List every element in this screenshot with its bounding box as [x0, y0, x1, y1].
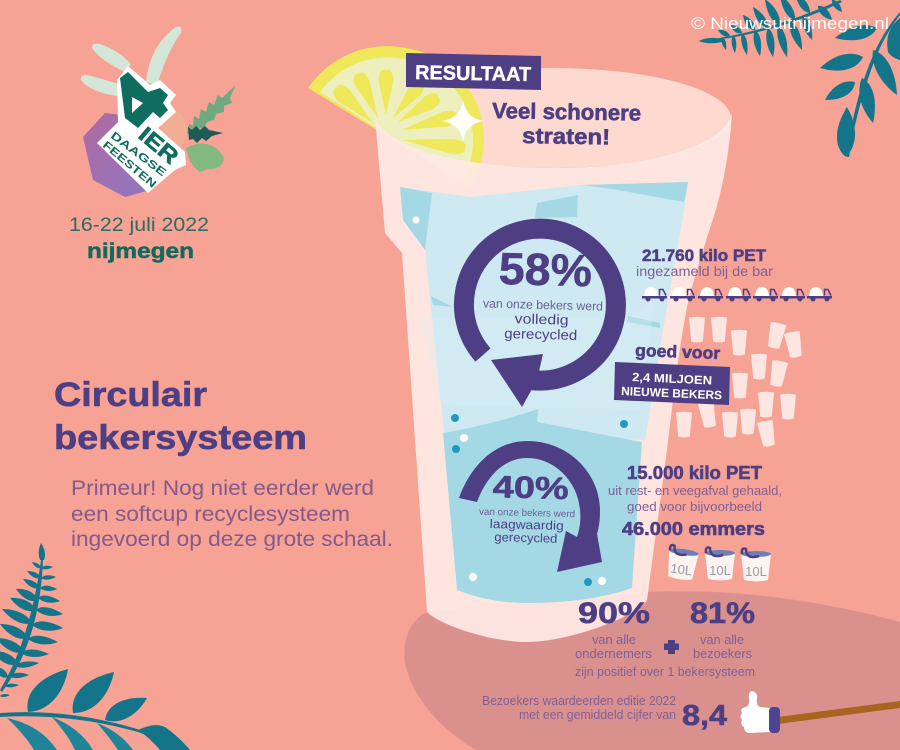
- thumbs up on stick: [740, 691, 900, 733]
- rating score: 8,4: [682, 700, 727, 732]
- stat 90%: van alle: [592, 633, 636, 647]
- thumb hand: [740, 691, 771, 733]
- stat 58%: gerecycled: [504, 325, 577, 343]
- logo peach circle: [139, 106, 187, 154]
- stat 40%: gerecycled: [494, 530, 558, 546]
- stat 21.760 kilo: [636, 246, 774, 279]
- logo purple octagon: [83, 113, 165, 197]
- stat 40%: van onze bekers werd: [479, 507, 575, 520]
- bucket icons: 10L: [670, 561, 693, 578]
- event city: nijmegen: [87, 240, 194, 263]
- cuff: [769, 707, 780, 733]
- good for label: goed voor: [635, 341, 721, 363]
- glass body front: [375, 113, 732, 642]
- table shadow: [404, 591, 900, 750]
- logo badge: [97, 66, 186, 193]
- rating caption: [482, 694, 676, 722]
- intro text: [71, 477, 393, 551]
- logo dark fern: [188, 126, 223, 143]
- stat 81%: van alle: [700, 633, 744, 647]
- bucket icons: [665, 545, 771, 582]
- left column heading: Circulair: [54, 376, 207, 414]
- intro text: Primeur! Nog niet eerder werd: [71, 477, 374, 500]
- glass: [308, 46, 732, 642]
- stat 90%: 90%: [578, 597, 650, 630]
- stat 15.000 kilo: [608, 463, 782, 539]
- lemon slice: [308, 46, 484, 187]
- stat 58%: van onze bekers werd: [483, 296, 603, 314]
- logo numeral counter: [132, 97, 143, 113]
- bubbles: [412, 216, 628, 586]
- new cups badge: 2,4 MILJOEN: [632, 370, 712, 387]
- plus sign: [664, 640, 679, 654]
- stat 40%: 40%: [492, 469, 569, 506]
- intro text: een softcup recyclesysteem: [71, 503, 350, 526]
- watermark: © Nieuwsuitnijmegen.nl: [691, 15, 889, 33]
- resultaat badge: RESULTAAT: [415, 62, 531, 86]
- circular arrow 40%: [459, 441, 602, 572]
- leaf branches: bottom left: [0, 543, 190, 750]
- stat 58%: volledig: [514, 310, 569, 328]
- resultaat badge: [406, 53, 541, 90]
- stat 81%: bezoekers: [693, 647, 752, 661]
- stat 90%: [575, 597, 652, 661]
- stat 81%: 81%: [690, 597, 755, 630]
- logo wordmark: FEESTEN: [100, 139, 158, 191]
- bucket icons: 10L: [745, 564, 767, 579]
- stat 21.760 kilo: ingezameld bij de bar: [636, 264, 774, 279]
- leaf branch: top right: [699, 0, 900, 157]
- logo numeral 4: [120, 72, 168, 128]
- heading: cleaner streets: [492, 98, 641, 150]
- stat 58%: 58%: [498, 243, 593, 296]
- circular arrow 58%: [464, 229, 616, 407]
- stat 15.000 kilo: goed voor bijvoorbeeld: [627, 499, 762, 514]
- water: upper: [400, 182, 688, 440]
- cup icons: [676, 317, 804, 448]
- stat 58%: [482, 242, 605, 344]
- intro text: ingevoerd op deze grote schaal.: [71, 528, 393, 551]
- positive caption: zijn positief over 1 bekersysteem: [575, 665, 755, 679]
- logo: [81, 27, 235, 197]
- sparkle: [442, 100, 484, 142]
- logo wordmark: DAAGSE: [108, 130, 168, 179]
- logo wordmark: IER: [134, 122, 184, 169]
- stat 15.000 kilo: 46.000 emmers: [622, 519, 765, 539]
- water: lower: [443, 409, 642, 603]
- bucket icons: 10L: [709, 563, 731, 578]
- left column heading: bekersysteem: [54, 419, 307, 457]
- new cups badge: [614, 362, 730, 405]
- stat 81%: [690, 597, 755, 661]
- logo splashes: [81, 27, 181, 96]
- stat 40%: [478, 469, 576, 546]
- event date: 16-22 juli 2022: [69, 215, 209, 236]
- left column heading: [54, 376, 307, 457]
- rating caption: Bezoekers waardeerden editie 2022: [482, 694, 676, 708]
- logo monstera leaf: [186, 144, 224, 172]
- truck icons: [642, 287, 832, 302]
- stat 40%: laagwaardig: [490, 517, 564, 533]
- stat 90%: ondernemers: [575, 647, 652, 661]
- stick: [778, 701, 900, 724]
- stat 15.000 kilo: 15.000 kilo PET: [627, 463, 762, 483]
- logo wordmark: [100, 122, 184, 191]
- lighter ice cube: [420, 300, 655, 410]
- rating caption: met een gemiddeld cijfer van: [519, 708, 676, 722]
- glass rim interior: [375, 68, 731, 168]
- logo fern: [187, 86, 235, 134]
- ice cube highlights: [400, 182, 688, 328]
- stat 21.760 kilo: 21.760 kilo PET: [642, 246, 767, 265]
- heading: cleaner streets: Veel schonere: [492, 98, 641, 126]
- heading: cleaner streets: straten!: [522, 123, 610, 150]
- new cups badge: NIEUWE BEKERS: [621, 384, 722, 402]
- stat 15.000 kilo: uit rest- en veegafval gehaald,: [608, 483, 782, 498]
